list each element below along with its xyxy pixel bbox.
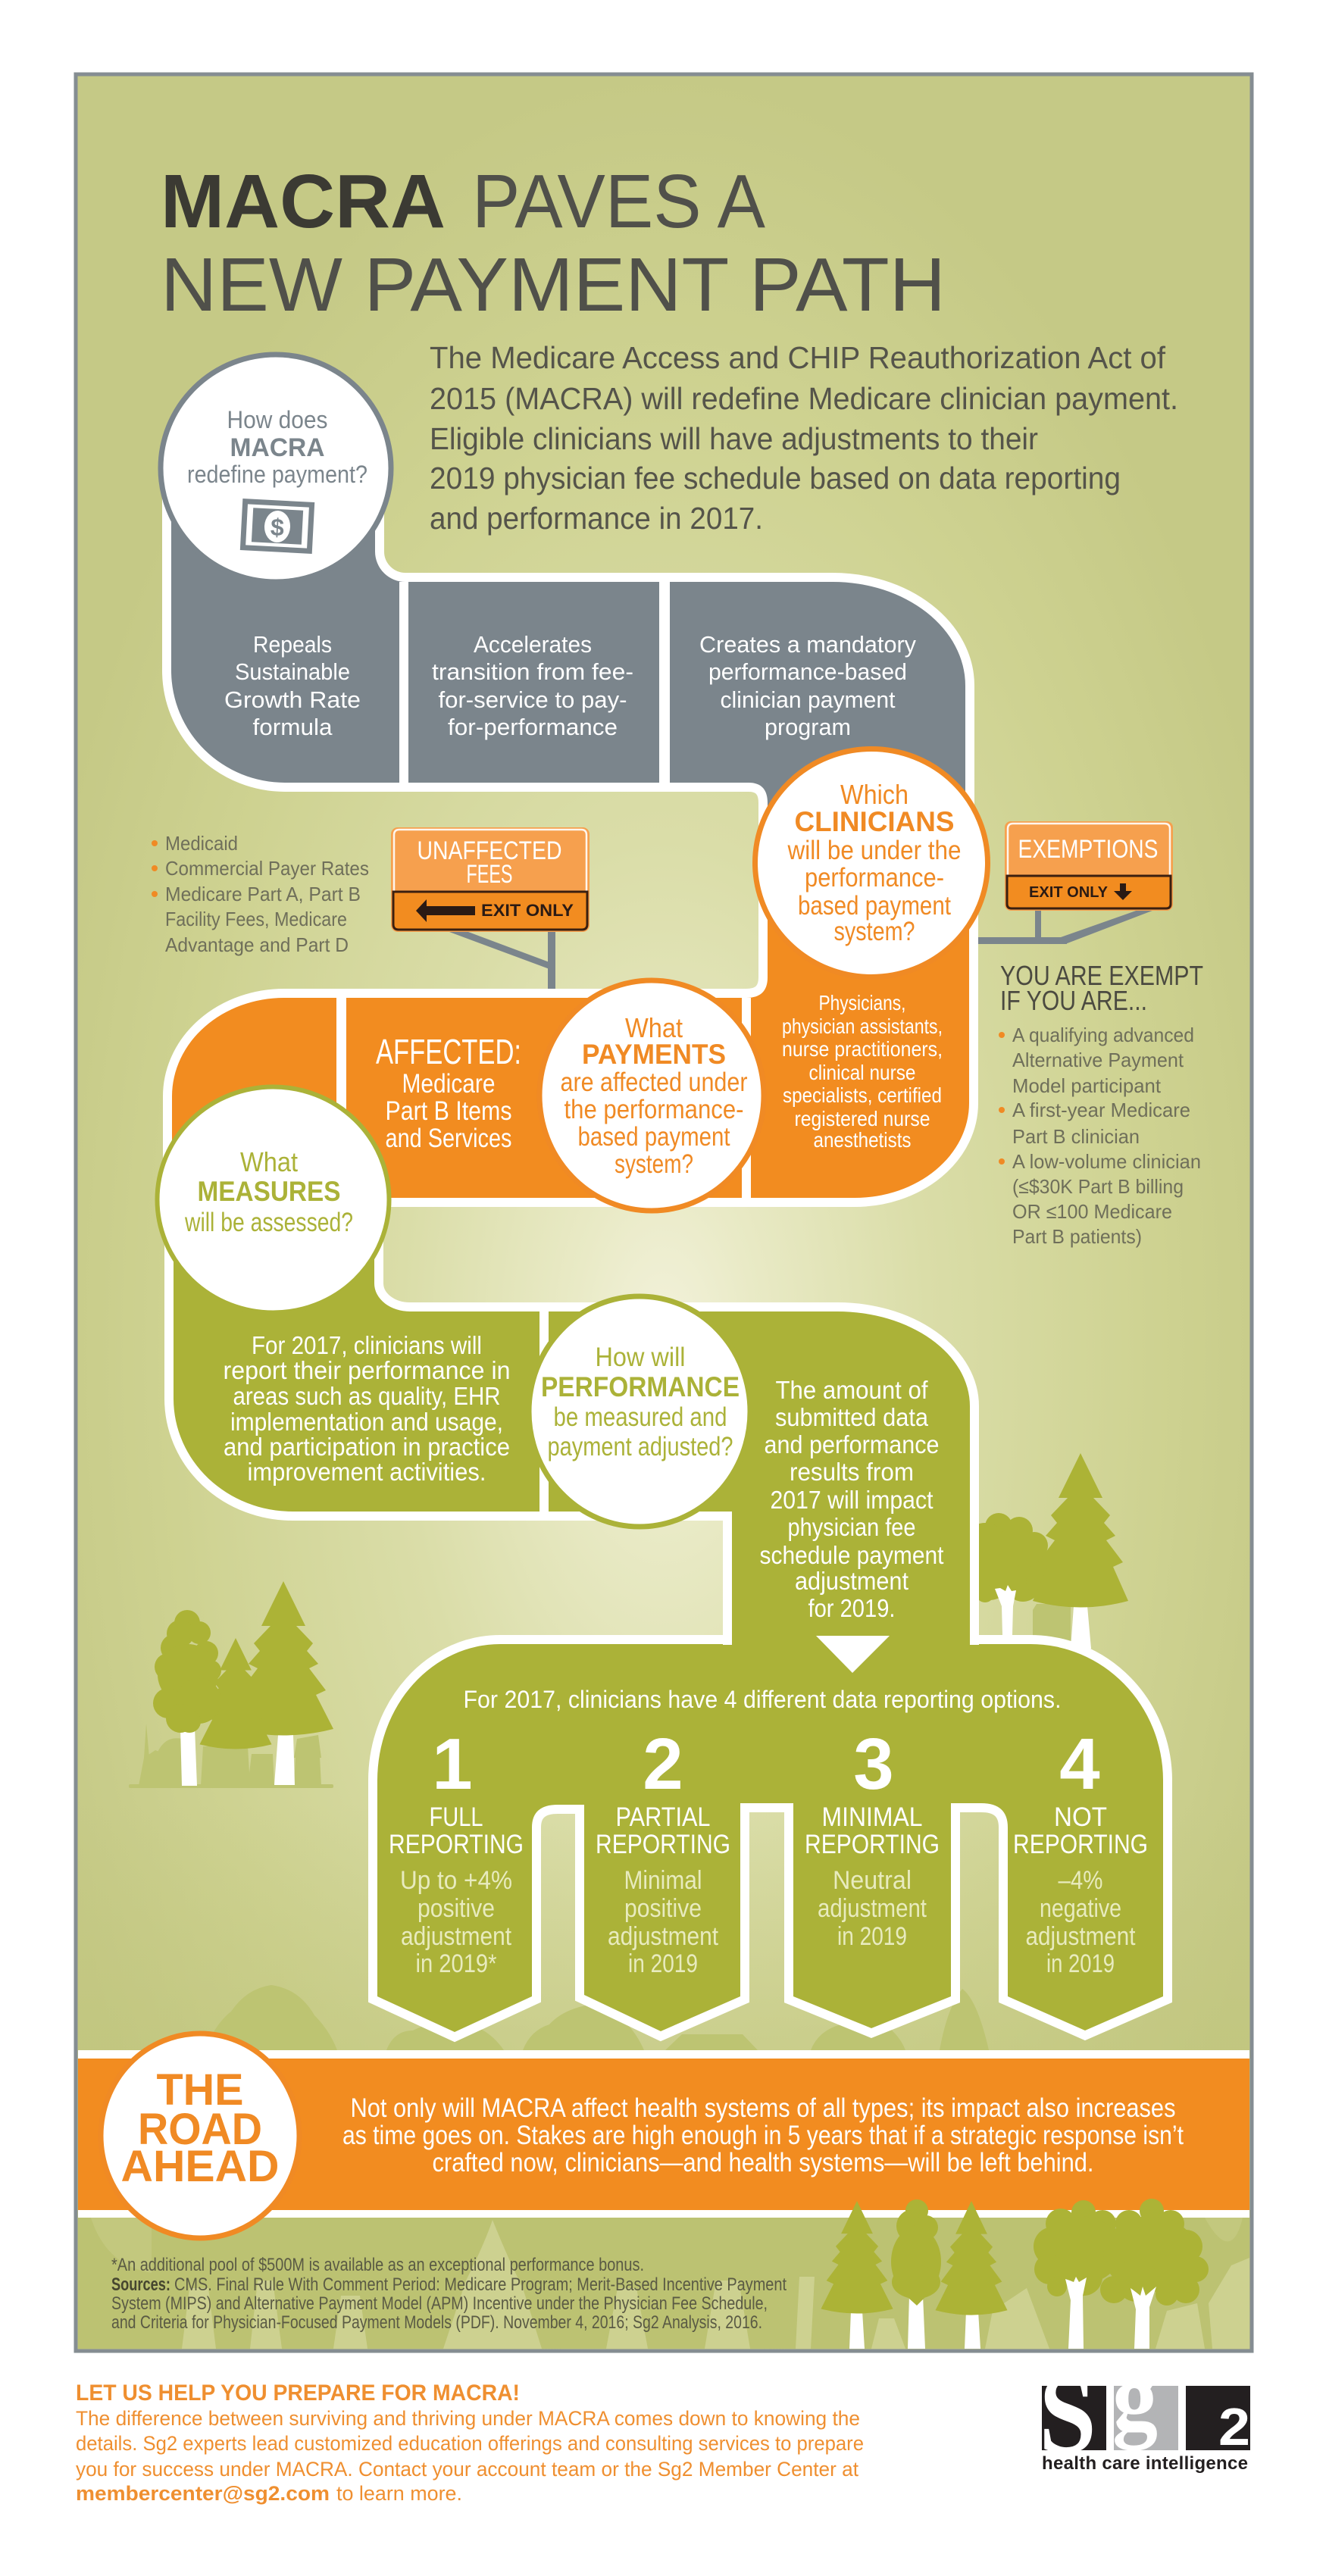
option 3: MINIMAL <box>821 1802 923 1832</box>
green column text: schedule payment <box>759 1541 944 1569</box>
green cell text: implementation and usage, <box>230 1408 503 1436</box>
circle: how will performance: PERFORMANCE <box>541 1371 740 1402</box>
circle: what payments: the performance- <box>564 1095 744 1124</box>
option 1: 1 <box>432 1724 473 1805</box>
left bullet list: unaffected fees: Facility Fees, Medicare <box>165 908 347 930</box>
panel: orange path section <box>172 864 969 1198</box>
title: NEW PAYMENT PATH <box>161 242 946 327</box>
leafy tree 1 <box>1034 2200 1121 2296</box>
intro paragraph: and performance in 2017. <box>430 501 763 536</box>
option 2: positive <box>624 1894 702 1923</box>
logo: Sg2: 2 <box>1218 2397 1250 2456</box>
green column text: submitted data <box>775 1403 929 1431</box>
circle: what payments: PAYMENTS <box>582 1039 726 1070</box>
sign: unaffected fees: EXIT ONLY <box>481 901 574 920</box>
circle: what payments: based payment <box>577 1122 730 1152</box>
option 2: Minimal <box>624 1866 702 1895</box>
intro paragraph: Eligible clinicians will have adjustments to their <box>430 421 1038 456</box>
exemptions bullet list: (≤$30K Part B billing <box>1012 1175 1184 1198</box>
option 2: 2 <box>643 1724 683 1805</box>
footnote: CMS. Final Rule With Comment Period: Medicare Program; Merit-Based Incentive Payment <box>174 2274 787 2295</box>
clinicians list text: clinical nurse <box>809 1061 915 1084</box>
trunk <box>180 1727 197 1786</box>
option 1 <box>389 1724 524 1978</box>
affected text <box>376 1032 521 1153</box>
green column text: and performance <box>764 1430 940 1458</box>
leafy tree <box>153 1610 221 1733</box>
grass <box>1033 1604 1071 1642</box>
grey cell 3 text: clinician payment <box>720 686 896 713</box>
circle: how does MACRA redefine payment: redefine payment? <box>187 461 367 488</box>
footnote: *An additional pool of $500M is available as an exceptional performance bonus. <box>111 2255 644 2275</box>
intro paragraph: 2019 physician fee schedule based on data reporting <box>430 461 1121 496</box>
exemptions heading <box>1000 960 1203 1016</box>
banner: the road ahead <box>78 2050 1249 2218</box>
grey cell 3 text <box>699 631 916 740</box>
exemptions bullet list: A first-year Medicare <box>1012 1099 1190 1121</box>
icon: arrow down <box>1114 883 1132 900</box>
clinicians list text: physician assistants, <box>782 1014 943 1038</box>
circle: how will performance <box>529 1296 750 1527</box>
green column text: 2017 will impact <box>770 1486 934 1514</box>
intro paragraph <box>430 340 1178 536</box>
affected text: Medicare <box>402 1069 496 1099</box>
footnote: Sources: <box>111 2274 170 2295</box>
panel: green path section <box>174 1200 989 1679</box>
exemptions bullet list: Model participant <box>1012 1074 1162 1097</box>
affected text: and Services <box>385 1124 512 1153</box>
circle: which clinicians: will be under the <box>787 836 961 865</box>
option 3: adjustment <box>818 1894 927 1923</box>
option 1: REPORTING <box>389 1830 524 1859</box>
banner text: crafted now, clinicians—and health systems—will be left behind. <box>432 2148 1094 2177</box>
grey cell 1 text <box>224 631 361 740</box>
grey cell 3 text: program <box>765 714 851 740</box>
circle: the road ahead <box>101 2034 299 2238</box>
pine 1 <box>821 2201 893 2314</box>
green cell text: report their performance in <box>223 1356 511 1384</box>
sign: exemptions: EXEMPTIONS <box>1018 835 1158 864</box>
footer call to action: you for success under MACRA. Contact your account team or the Sg2 Member Center at <box>76 2458 858 2481</box>
green cell text: and participation in practice <box>224 1433 510 1461</box>
logo: Sg2: g <box>1112 2343 1158 2450</box>
intro paragraph: The Medicare Access and CHIP Reauthorization Act of <box>430 340 1166 375</box>
trunk <box>1071 1606 1091 1649</box>
option 4: adjustment <box>1026 1922 1136 1951</box>
footnote: System (MIPS) and Alternative Payment Model (APM) Incentive under the Physician Fee Schedule, <box>111 2293 768 2314</box>
circle: how does MACRA redefine payment <box>161 355 391 582</box>
option 1: FULL <box>429 1802 483 1832</box>
option 2 <box>596 1724 730 1978</box>
circle: how will performance: How will <box>596 1343 685 1372</box>
circle: how does MACRA redefine payment: MACRA <box>230 433 324 462</box>
background forest above the banner <box>205 1985 989 2050</box>
trees: bottom right <box>821 2199 1209 2349</box>
option 1: Up to +4% <box>400 1866 512 1895</box>
forked trunk 2 <box>1131 2287 1156 2349</box>
clinicians list text: Physicians, <box>818 991 906 1014</box>
grey cell 1 text: formula <box>253 714 333 740</box>
option 3: REPORTING <box>805 1830 940 1859</box>
leafy tree <box>962 1513 1065 1602</box>
option 2: REPORTING <box>596 1830 730 1859</box>
sign post: exemptions <box>977 908 1156 944</box>
circle: what measures: will be assessed? <box>184 1208 353 1237</box>
logo: Sg2: health care intelligence <box>1042 2453 1248 2474</box>
title: PAVES A <box>472 159 765 244</box>
exemptions heading: YOU ARE EXEMPT <box>1000 960 1203 991</box>
trees: left cluster <box>129 1581 333 1788</box>
grey cell 2 text <box>432 631 633 740</box>
title <box>161 159 946 327</box>
banner text: as time goes on. Stakes are high enough in 5 years that if a strategic response isn’t <box>342 2121 1184 2150</box>
pine <box>233 1581 333 1735</box>
circle: what measures: MEASURES <box>197 1176 341 1207</box>
circle: what measures <box>158 1086 389 1312</box>
sign: exemptions: EXIT ONLY <box>1029 884 1109 901</box>
intro paragraph: 2015 (MACRA) will redefine Medicare clinician payment. <box>430 381 1178 416</box>
trunk <box>274 1735 295 1785</box>
option 2: in 2019 <box>628 1949 698 1978</box>
left bullet list: unaffected fees <box>152 832 369 956</box>
green cell text <box>223 1331 511 1486</box>
panel: grey path section <box>171 455 965 871</box>
trunks <box>849 2296 980 2349</box>
icon: white down triangle <box>816 1636 890 1673</box>
circle: the road ahead: AHEAD <box>121 2142 279 2191</box>
exemptions bullet list: Alternative Payment <box>1012 1049 1184 1071</box>
panel: background <box>76 74 1252 2351</box>
trees: right cluster <box>962 1453 1128 1649</box>
grey cell 3 text: performance-based <box>708 658 907 685</box>
small pine <box>199 1638 272 1749</box>
banner text: Not only will MACRA affect health systems of all types; its impact also increases <box>350 2093 1176 2123</box>
footer call to action: The difference between surviving and thriving under MACRA comes down to knowing the <box>76 2407 860 2430</box>
circle: how will performance: be measured and <box>553 1402 727 1432</box>
option 4: –4% <box>1058 1866 1103 1895</box>
circle: which clinicians: system? <box>833 917 915 946</box>
circle: which clinicians: CLINICIANS <box>794 806 955 837</box>
exemptions heading: IF YOU ARE... <box>1000 985 1147 1016</box>
option 2: adjustment <box>608 1922 718 1951</box>
pine <box>1033 1453 1128 1608</box>
option 1: positive <box>418 1894 495 1923</box>
grey cell 2 text: for-performance <box>448 714 618 740</box>
banner text <box>342 2093 1184 2177</box>
sign: unaffected fees <box>391 827 590 932</box>
grey cell 2 text: Accelerates <box>474 631 592 658</box>
sign: unaffected fees: FEES <box>467 860 512 889</box>
circle: the road ahead: ROAD <box>138 2105 262 2154</box>
circle: which clinicians: based payment <box>798 891 951 921</box>
grass <box>129 1724 333 1788</box>
clinicians list text: nurse practitioners, <box>782 1037 943 1061</box>
footer call to action: details. Sg2 experts lead customized education offerings and consulting services to prepare <box>76 2432 864 2455</box>
option 1: adjustment <box>401 1922 511 1951</box>
grey cell 2 text: for-service to pay- <box>438 686 627 713</box>
footnote: and Criteria for Physician-Focused Payment Models (PDF). November 4, 2016; Sg2 Analysis, 2016. <box>111 2312 762 2333</box>
icon: dollar bill: $ <box>270 514 285 541</box>
panel border <box>76 74 1252 2351</box>
option 4: NOT <box>1054 1802 1107 1832</box>
background forest below the banner <box>78 2218 1249 2349</box>
pine 2 <box>935 2201 1008 2315</box>
affected text: Part B Items <box>385 1096 512 1126</box>
logo: Sg2: S <box>1039 2351 1096 2477</box>
circle: what payments: What <box>625 1012 683 1043</box>
icon: arrow left <box>416 899 475 922</box>
title: MACRA <box>161 159 446 244</box>
cypress tree <box>891 2199 941 2306</box>
clinicians list text: registered nurse <box>794 1107 930 1130</box>
grey cell 1 text: Sustainable <box>235 658 350 685</box>
logo: Sg2 <box>1039 2343 1250 2477</box>
grey cell 2 text: transition from fee- <box>432 658 633 685</box>
green cell text: For 2017, clinicians will <box>252 1331 482 1359</box>
exemptions bullet list: A low-volume clinician <box>1012 1150 1201 1173</box>
forked trunk 1 <box>1065 2277 1087 2349</box>
left bullet list: unaffected fees: Medicare Part A, Part B <box>165 883 361 905</box>
footer call to action <box>76 2381 864 2505</box>
green column text: physician fee <box>788 1513 915 1541</box>
leafy tree 2 <box>1100 2199 1209 2306</box>
grey cell 3 text: Creates a mandatory <box>699 631 916 658</box>
panel: green reporting options shape <box>377 1591 1163 2032</box>
clinicians list text: specialists, certified <box>783 1083 942 1107</box>
green cell text: areas such as quality, EHR <box>233 1382 500 1410</box>
affected text: AFFECTED: <box>376 1032 521 1071</box>
green column text <box>759 1376 944 1622</box>
sign: unaffected fees: UNAFFECTED <box>417 836 562 865</box>
circle: how will performance: payment adjusted? <box>547 1432 733 1462</box>
sign: exemptions <box>1005 821 1173 911</box>
option 4: negative <box>1040 1894 1121 1923</box>
option 2: PARTIAL <box>615 1802 711 1832</box>
option 4: in 2019 <box>1046 1949 1115 1978</box>
footer call to action: LET US HELP YOU PREPARE FOR MACRA! <box>76 2381 520 2406</box>
circle: how does MACRA redefine payment: How does <box>227 406 327 433</box>
circle: what payments <box>539 980 764 1211</box>
icon: dollar bill <box>242 502 312 551</box>
option 3: in 2019 <box>837 1922 907 1951</box>
left bullet list: unaffected fees: Advantage and Part D <box>165 933 349 956</box>
footnote <box>111 2255 787 2333</box>
grey cell 1 text: Growth Rate <box>224 686 361 713</box>
reporting intro text: For 2017, clinicians have 4 different data reporting options. <box>464 1686 1061 1713</box>
grey cell 1 text: Repeals <box>253 631 332 658</box>
footer call to action: membercenter@sg2.com <box>76 2482 330 2505</box>
exemptions bullet list: Part B clinician <box>1012 1125 1140 1148</box>
footer call to action: to learn more. <box>336 2482 462 2505</box>
option 3: 3 <box>853 1724 894 1805</box>
green column text: for 2019. <box>808 1594 896 1622</box>
trunk <box>995 1585 1016 1635</box>
option 4: REPORTING <box>1013 1830 1148 1859</box>
option 1: in 2019* <box>415 1949 497 1978</box>
green column text: adjustment <box>795 1567 908 1595</box>
circle: what payments: system? <box>615 1149 693 1179</box>
left bullet list: unaffected fees: Commercial Payer Rates <box>165 857 369 880</box>
option 4: 4 <box>1059 1724 1100 1805</box>
clinicians list text <box>782 991 943 1152</box>
circle: which clinicians: Which <box>840 779 908 810</box>
circle: which clinicians <box>755 749 988 977</box>
exemptions bullet list: OR ≤100 Medicare <box>1012 1200 1172 1223</box>
circle: what payments: are affected under <box>561 1068 748 1097</box>
exemptions bullet list <box>999 1024 1201 1248</box>
option 4 <box>1013 1724 1148 1978</box>
circle: which clinicians: performance- <box>805 863 944 893</box>
green cell text: improvement activities. <box>247 1458 486 1486</box>
clinicians list text: anesthetists <box>814 1128 911 1152</box>
option 3 <box>805 1724 940 1951</box>
green column text: The amount of <box>776 1376 928 1404</box>
exemptions bullet list: A qualifying advanced <box>1012 1024 1194 1046</box>
green column text: results from <box>790 1458 914 1486</box>
exemptions bullet list: Part B patients) <box>1012 1225 1142 1248</box>
left bullet list: unaffected fees: Medicaid <box>165 832 238 855</box>
circle: the road ahead: THE <box>156 2065 244 2115</box>
circle: what measures: What <box>240 1146 298 1177</box>
option 3: Neutral <box>833 1866 912 1895</box>
sign post: unaffected fees <box>449 930 555 989</box>
